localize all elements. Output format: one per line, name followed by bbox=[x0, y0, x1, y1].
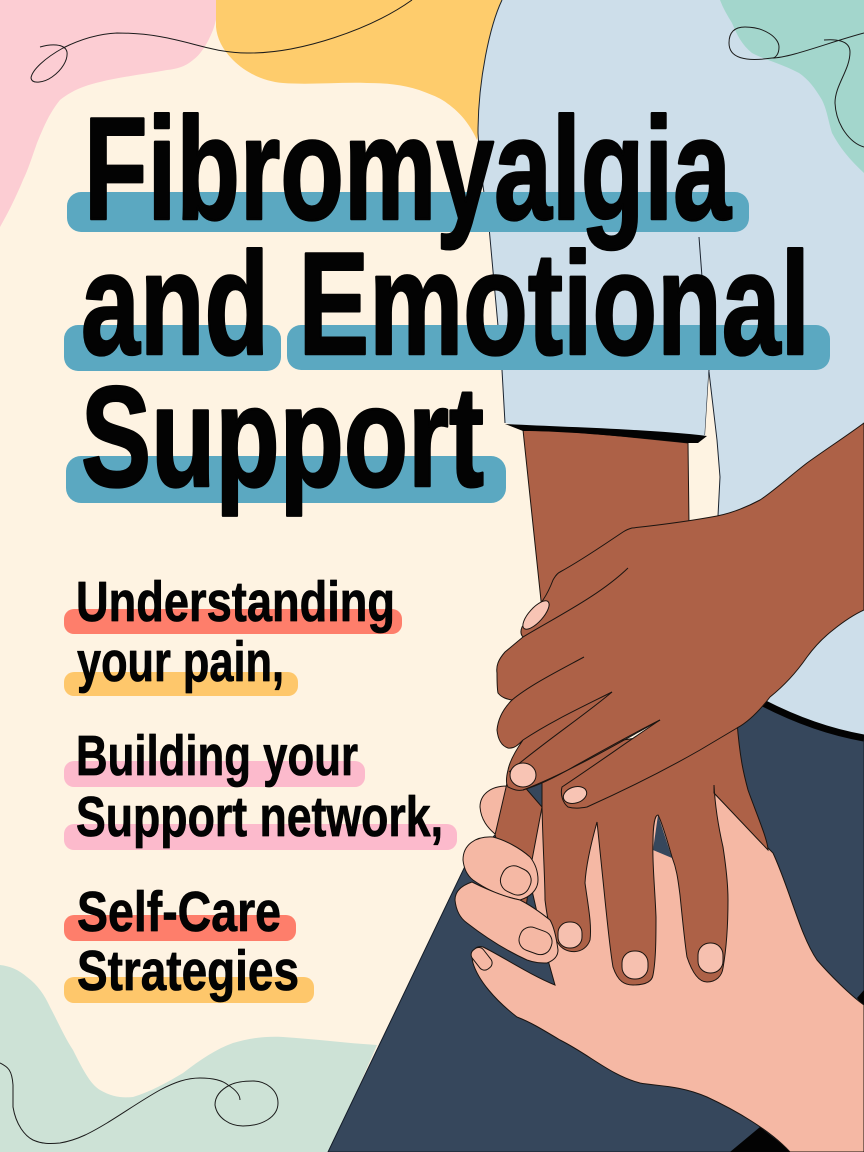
title highlights bbox=[64, 192, 830, 503]
waistband bbox=[763, 703, 864, 738]
upper hand fingernails bbox=[510, 597, 589, 806]
upper brown hand bbox=[497, 423, 864, 808]
light hand bbox=[472, 793, 864, 1152]
squiggle top right bbox=[729, 27, 864, 147]
trousers bbox=[328, 700, 864, 1152]
light finger behind: top bbox=[480, 786, 520, 840]
subtitle lines: Strategies bbox=[77, 939, 299, 1003]
subtitle lines: your pain, bbox=[77, 630, 284, 694]
subtitle highlights bbox=[64, 609, 457, 1003]
background blob: pink bbox=[0, 0, 218, 227]
black wedges at lower edge bbox=[730, 990, 864, 1152]
forearm: brown bbox=[523, 430, 689, 610]
subtitle lines bbox=[76, 570, 443, 1003]
subtitle lines: Support network, bbox=[76, 785, 443, 849]
brown fingernails bbox=[558, 922, 723, 979]
upper hand finger lines bbox=[509, 568, 660, 790]
squiggle top left bbox=[31, 0, 412, 82]
background blob: yellow bbox=[216, 0, 502, 140]
torso edge line bbox=[709, 372, 720, 516]
title bbox=[81, 87, 810, 517]
light hand fingernails bbox=[469, 862, 555, 973]
light finger: index bbox=[455, 882, 558, 963]
squiggle bottom left bbox=[0, 1063, 278, 1144]
sleeve cuff shadow bbox=[505, 424, 707, 443]
background blob: teal bbox=[720, 0, 864, 173]
lower brown hand: left finger bbox=[495, 770, 542, 908]
light finger: middle bbox=[463, 837, 538, 900]
subtitle lines: Building your bbox=[76, 724, 358, 788]
cream gap between arm and torso bbox=[688, 372, 720, 525]
lower brown hand: fingers bbox=[542, 722, 768, 985]
title: Support bbox=[81, 358, 484, 517]
subtitle lines: Understanding bbox=[76, 570, 395, 634]
subtitle lines: Self-Care bbox=[77, 880, 281, 944]
trouser gap between fingers bbox=[653, 815, 672, 858]
shirt bbox=[478, 0, 864, 735]
background blob: green bbox=[0, 965, 377, 1152]
shirt outline and fold bbox=[478, 0, 709, 435]
